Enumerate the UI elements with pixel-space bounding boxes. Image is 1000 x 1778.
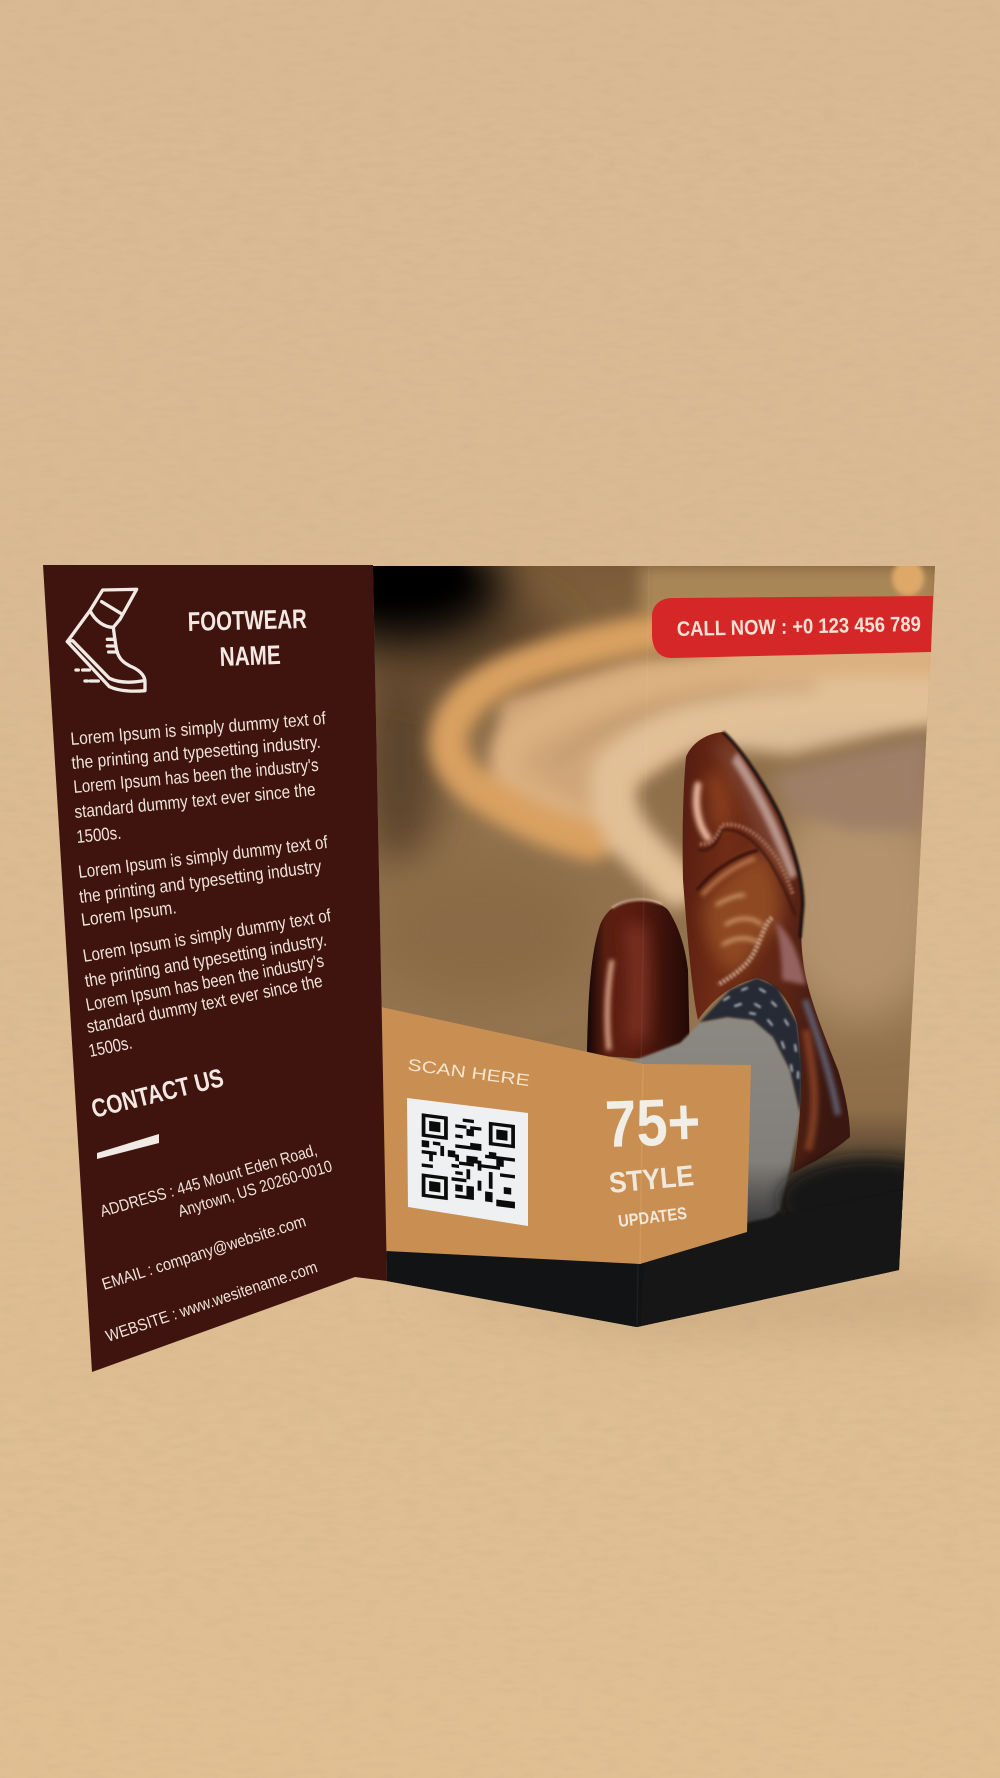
shoe gloss: [696, 745, 838, 1150]
text block: paragraph one: standard dummy text ever since the: [73, 779, 316, 822]
text block: paragraph two: [77, 832, 329, 930]
text block: paragraph one: 1500s.: [75, 823, 122, 847]
text block: paragraph three: Lorem Ipsum is simply dummy text of: [81, 905, 333, 966]
blurred photo backdrop: [295, 530, 950, 1020]
text block: contact details: Anytown, US 20260-0010: [176, 1157, 334, 1221]
text block: paragraph one: Lorem Ipsum is simply dummy text of: [70, 708, 327, 749]
divider bar: [97, 1134, 159, 1159]
text block: paragraph one: [70, 708, 327, 847]
panel: orange scan and style box: [381, 1007, 751, 1264]
text block: contact details: WEBSITE : www.wesitename.com: [104, 1258, 320, 1346]
patterned sock: [700, 978, 802, 1113]
text block: contact details: ADDRESS : 445 Mount Eden Road,: [98, 1141, 319, 1221]
text block: paragraph two: Lorem Ipsum is simply dummy text of: [77, 832, 329, 882]
grey trouser: [630, 1017, 800, 1240]
photo lower shadow: [386, 1118, 906, 1327]
text block: paragraph two: Lorem Ipsum.: [80, 897, 178, 930]
phone number: CALL NOW : +0 123 456 789: [677, 613, 921, 641]
right shoe: [683, 732, 850, 1173]
text block: paragraph two: the printing and typesetting industry: [78, 856, 323, 907]
text block: paragraph three: Lorem Ipsum has been the industry's: [84, 950, 326, 1015]
text block: paragraph three: [81, 905, 333, 1061]
text block: contact details: [98, 1141, 334, 1346]
text block: paragraph three: standard dummy text ever since the: [85, 971, 324, 1037]
text block: paragraph one: Lorem Ipsum has been the industry's: [73, 755, 319, 797]
blurred swirl bands: [448, 627, 930, 885]
left shoe: [587, 899, 690, 1062]
text block: paragraph one: the printing and typesetting industry.: [71, 732, 321, 773]
panel: brown info panel: [43, 565, 387, 1372]
75+ figure: 75+: [604, 1084, 701, 1161]
panel: red call-now tab: [652, 596, 933, 658]
panel: product photo: [373, 566, 935, 1327]
text block: paragraph three: 1500s.: [87, 1033, 134, 1061]
brochure: [43, 530, 960, 1372]
title: footwear name: NAME: [219, 640, 281, 672]
heading: contact us: CONTACT US: [88, 1062, 226, 1124]
style label: STYLE: [608, 1160, 695, 1200]
icon: walking boot: [67, 589, 145, 691]
title: footwear name: FOOTWEAR: [187, 604, 307, 637]
QR code: [407, 1098, 528, 1226]
scan here label: SCAN HERE: [406, 1056, 531, 1090]
title: footwear name: [187, 604, 307, 672]
text block: contact details: EMAIL : company@website.com: [100, 1212, 308, 1294]
updates label: UPDATES: [617, 1204, 688, 1231]
heel shadow: [771, 1148, 905, 1240]
text block: paragraph three: the printing and typesetting industry.: [83, 930, 328, 991]
